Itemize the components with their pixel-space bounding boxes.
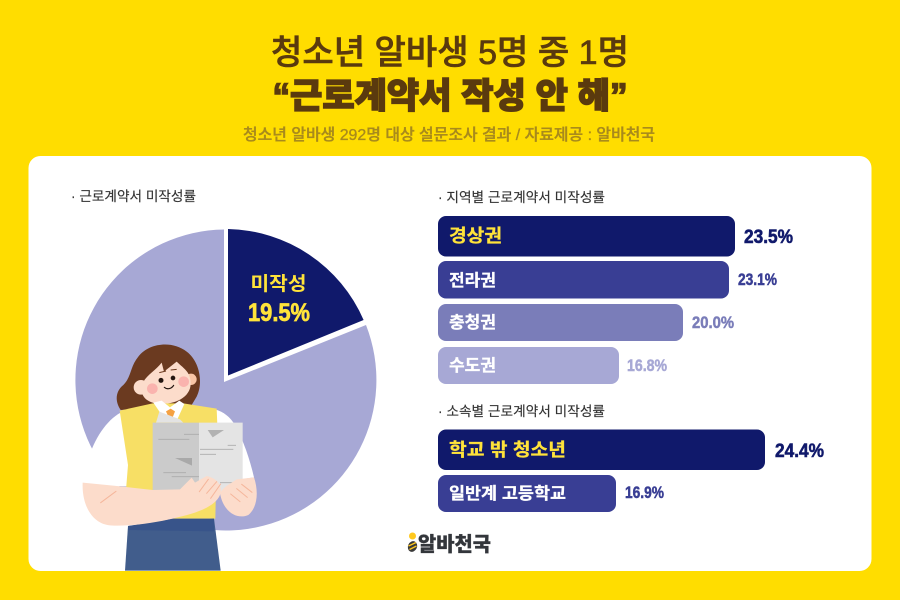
pie chart — [75, 229, 376, 530]
bar: 일반계 고등학교: 16.9% — [625, 483, 664, 502]
bar: 충청권: 20.0% — [692, 313, 734, 332]
ears — [134, 380, 148, 395]
title: “근로계약서 작성 안 해” — [272, 77, 628, 116]
bar chart: region — [438, 216, 793, 384]
bar: 전라권: 전라권 — [449, 271, 496, 290]
bar: 일반계 고등학교: 일반계 고등학교 — [449, 484, 566, 503]
cheeks — [147, 383, 158, 394]
illustration: student holding contract — [83, 345, 257, 571]
pie label — [248, 273, 310, 327]
hair — [117, 345, 200, 410]
title: 청소년 알바생 5명 중 1명 — [271, 34, 629, 72]
bar chart: affiliation — [438, 430, 824, 512]
bar: 학교 밖 청소년 — [438, 430, 824, 470]
pie slice: not written — [228, 229, 364, 376]
skirt — [125, 519, 221, 571]
subtitle: 청소년 알바생 292명 대상 설문조사 결과 / 자료제공 : 알바천국 — [243, 126, 655, 144]
skin creases — [101, 479, 252, 503]
bar: 전라권: 23.1% — [738, 270, 777, 289]
bar: 학교 밖 청소년: 24.4% — [775, 441, 824, 462]
bar: 일반계 고등학교 — [438, 475, 664, 512]
bar: 충청권 — [438, 304, 734, 341]
face — [141, 362, 191, 404]
bar: 전라권 — [438, 261, 777, 298]
bar: 충청권: 충청권 — [449, 313, 496, 332]
bar: 학교 밖 청소년: 학교 밖 청소년 — [449, 440, 566, 460]
icon: bee — [406, 532, 419, 553]
bar: 수도권: 수도권 — [449, 356, 496, 375]
heading: pie chart: · 근로계약서 미작성률 — [71, 189, 196, 204]
bar: 수도권: 16.8% — [627, 356, 667, 375]
heading: affiliation: · 소속별 근로계약서 미작성률 — [438, 404, 605, 419]
eyes and mouth — [158, 369, 177, 389]
pie slice: written — [75, 230, 376, 530]
contract papers — [153, 412, 243, 494]
vest — [120, 403, 217, 519]
bar: 수도권 — [438, 347, 667, 384]
shirt sleeves — [83, 413, 130, 487]
heading: region: · 지역별 근로계약서 미작성률 — [438, 190, 605, 205]
left arm and hand — [83, 476, 221, 526]
collar and tie — [153, 401, 184, 419]
title — [271, 34, 629, 116]
bar: 경상권: 경상권 — [449, 226, 502, 246]
bar: 경상권 — [438, 216, 793, 256]
pie label: 미작성 — [250, 273, 306, 295]
bar: 경상권: 23.5% — [744, 227, 793, 248]
panel: white card — [28, 156, 872, 571]
logo: 알바천국: 알바천국 — [418, 533, 491, 556]
pie label: 19.5% — [248, 299, 310, 327]
right hand — [220, 477, 257, 516]
